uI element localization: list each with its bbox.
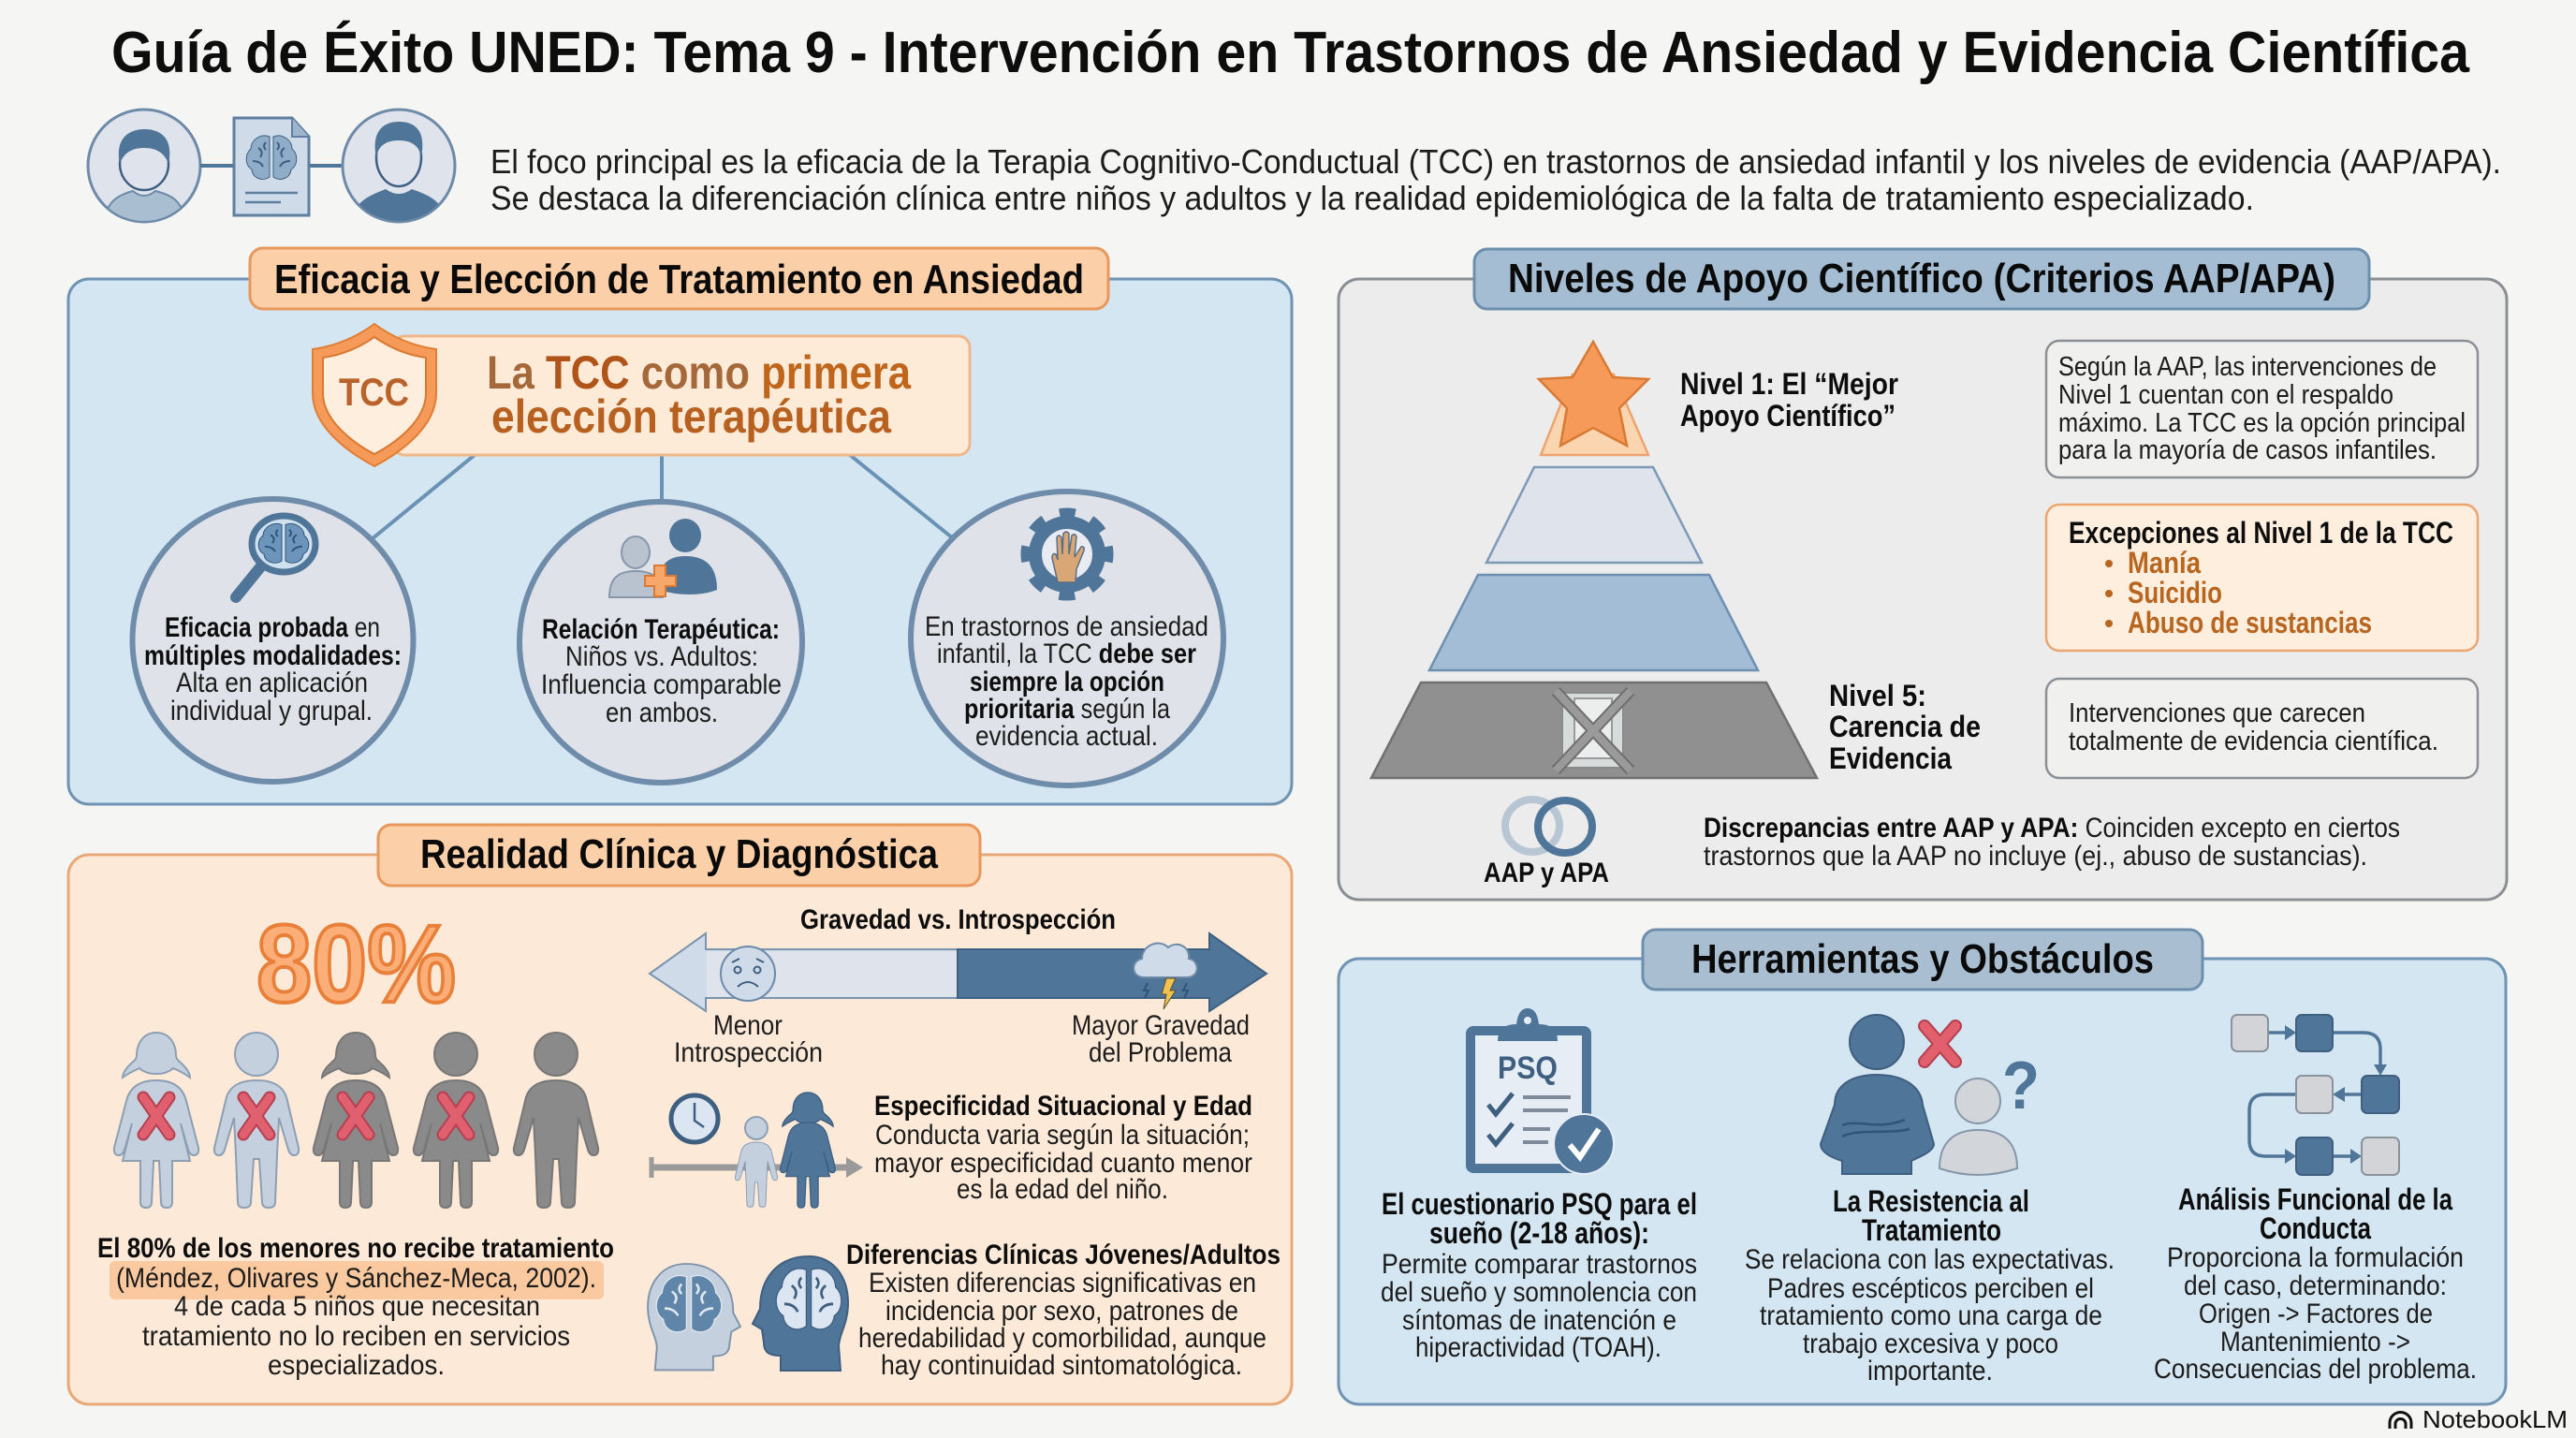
- circle: TCC prioritaria: prioritaria según la: [964, 694, 1170, 725]
- circle: TCC prioritaria: En trastornos de ansiedad: [925, 611, 1208, 642]
- heading pill: niveles: Niveles de Apoyo Científico (Criterios AAP/APA): [1508, 256, 2335, 301]
- text: análisis funcional: Origen -> Factores de: [2199, 1299, 2433, 1329]
- chart: gravedad vs introspección arrow: del Problema: [1089, 1037, 1232, 1068]
- box: excepciones al nivel 1: Manía: [2128, 546, 2201, 580]
- panel: herramientas y obstáculos: [1339, 930, 2506, 1404]
- text: cuestionario PSQ: hiperactividad (TOAH).: [1415, 1332, 1661, 1363]
- text: análisis funcional: del caso, determinando:: [2184, 1270, 2447, 1301]
- icon: adult in circle: [343, 110, 455, 225]
- heading pill: eficacia: [250, 248, 1108, 309]
- chart: gravedad vs introspección arrow: Gravedad vs. Introspección: [800, 904, 1116, 935]
- circle: relación terapéutica: Influencia comparable: [541, 669, 782, 700]
- text: 80% sin tratamiento: tratamiento no lo reciben en servicios: [142, 1321, 570, 1352]
- chart: evidence pyramid: [1371, 342, 1817, 778]
- text: análisis funcional: Conducta: [2260, 1211, 2371, 1245]
- icon: two people with plus: [609, 519, 717, 597]
- circle: relación terapéutica: Relación Terapéutica:: [542, 614, 780, 645]
- text: 80% sin tratamiento: especializados.: [268, 1350, 445, 1381]
- circle: TCC prioritaria: [911, 492, 1223, 785]
- icon: resistant adult and sceptical parent: ?: [2002, 1049, 2040, 1123]
- heading pill: herramientas: [1643, 930, 2203, 990]
- statistic: 80%: 80%: [256, 902, 456, 1026]
- icon: clock, timeline and children: [651, 1093, 863, 1208]
- text: especificidad situacional: [874, 1091, 1252, 1205]
- icon: resistant adult and sceptical parent: [1821, 1015, 2040, 1175]
- icon: PSQ clipboard: PSQ: [1498, 1050, 1558, 1086]
- heading pill: realidad clínica: [378, 825, 980, 886]
- circle: relación terapéutica: [520, 502, 802, 783]
- chart: gravedad vs introspección arrow: Mayor Gravedad: [1072, 1010, 1250, 1041]
- icon: AAP y APA rings: AAP y APA: [1484, 858, 1609, 888]
- icon: functional analysis flowchart: [2232, 1015, 2399, 1175]
- chart: gravedad vs introspección arrow: Menor: [713, 1010, 783, 1041]
- logo: NotebookLM: NotebookLM: [2422, 1405, 2568, 1433]
- circle: eficacia probada: múltiples modalidades:: [144, 640, 402, 671]
- text: resistencia: Padres escépticos perciben el: [1767, 1273, 2094, 1304]
- icon: PSQ clipboard: [1466, 1008, 1614, 1174]
- callout: TCC primera elección: elección terapéutica: [491, 390, 892, 443]
- text: resistencia: trabajo excesiva y poco: [1803, 1328, 2058, 1359]
- heading pill: eficacia: Eficacia y Elección de Tratamiento en Ansiedad: [274, 257, 1084, 302]
- text: 80% sin tratamiento: El 80% de los menores no recibe tratamiento: [97, 1233, 614, 1264]
- pictogram: five children: [114, 1033, 598, 1208]
- child 5: treated: [514, 1033, 598, 1208]
- circle: TCC prioritaria: evidencia actual.: [975, 721, 1158, 752]
- text: discrepancias: trastornos que la AAP no incluye (ej., abuso de sustancias).: [1704, 841, 2367, 872]
- circle: relación terapéutica: Niños vs. Adultos:: [565, 641, 758, 672]
- circle: eficacia probada: Alta en aplicación: [176, 668, 368, 698]
- text: diferencias jóvenes/adultos: incidencia por sexo, patrones de: [886, 1296, 1238, 1327]
- child 4: girl, no treatment: [414, 1033, 498, 1208]
- text: resistencia: La Resistencia al: [1833, 1184, 2029, 1218]
- circle: eficacia probada: individual y grupal.: [170, 696, 373, 726]
- icon: AAP y APA rings: [1484, 800, 1609, 888]
- chart: gravedad vs introspección arrow: Introspección: [674, 1037, 823, 1068]
- heading pill: herramientas: Herramientas y Obstáculos: [1691, 936, 2154, 982]
- icon: storm cloud: [1134, 944, 1197, 1009]
- intro text: Se destaca la diferenciación clínica entre niños y adultos y la realidad epidemiológica de la falta de tratamiento especializado.: [490, 179, 2254, 217]
- text: resistencia: [1745, 1184, 2115, 1387]
- text: resistencia: Tratamiento: [1862, 1213, 2001, 1247]
- heading pill: niveles: [1474, 249, 2369, 309]
- text: cuestionario PSQ: [1381, 1187, 1697, 1363]
- text: resistencia: Se relaciona con las expectativas.: [1745, 1244, 2115, 1275]
- icon: child in circle: [88, 110, 200, 225]
- box: excepciones al nivel 1: Excepciones al Nivel 1 de la TCC: [2069, 516, 2453, 550]
- box: respaldo AAP nivel 1: Nivel 1 cuentan con el respaldo: [2058, 380, 2393, 410]
- text: especificidad situacional: es la edad del niño.: [957, 1174, 1168, 1205]
- child 2: boy, no treatment: [214, 1033, 299, 1208]
- text: discrepancias: Discrepancias entre AAP y APA: Coinciden excepto en ciertos: [1704, 813, 2400, 844]
- box: excepciones al nivel 1: [2046, 505, 2478, 651]
- box: respaldo AAP nivel 1: [2046, 341, 2478, 477]
- icon: TCC shield: [313, 324, 436, 466]
- panel: eficacia y elección de tratamiento: [68, 248, 1292, 804]
- circle: TCC prioritaria: infantil, la TCC debe ser: [937, 638, 1196, 669]
- box: respaldo AAP nivel 1: máximo. La TCC es la opción principal: [2058, 408, 2466, 438]
- panel: niveles de apoyo científico: [1339, 249, 2507, 900]
- text: análisis funcional: Análisis Funcional de la: [2178, 1182, 2452, 1216]
- circle: relación terapéutica: en ambos.: [606, 697, 718, 728]
- child 1: girl, no treatment: [114, 1033, 198, 1208]
- panel: realidad clínica y diagnóstica: [68, 825, 1292, 1404]
- box: excepciones al nivel 1: Suicidio: [2128, 576, 2222, 609]
- text: diferencias jóvenes/adultos: Existen diferencias significativas en: [869, 1268, 1256, 1299]
- label: nivel 5: Evidencia: [1829, 741, 1952, 775]
- text: cuestionario PSQ: El cuestionario PSQ para el: [1382, 1187, 1697, 1221]
- icon: TCC shield: TCC: [339, 370, 409, 414]
- text: cuestionario PSQ: síntomas de inatención e: [1402, 1305, 1676, 1336]
- text: análisis funcional: Consecuencias del problema.: [2154, 1354, 2477, 1385]
- text: resistencia: importante.: [1867, 1356, 1993, 1387]
- label: nivel 5: [1829, 679, 1981, 775]
- callout: TCC primera elección: La TCC como primera: [487, 346, 912, 399]
- circle: eficacia probada: Eficacia probada en: [165, 612, 380, 643]
- text: cuestionario PSQ: sueño (2-18 años):: [1429, 1216, 1649, 1250]
- icon: sad face: [721, 946, 775, 1001]
- intro text: [490, 142, 2501, 217]
- icon group: child, brain document, adult: [88, 110, 455, 225]
- box: excepciones al nivel 1: Abuso de sustancias: [2128, 606, 2372, 639]
- heading pill: realidad clínica: Realidad Clínica y Diagnóstica: [420, 831, 938, 877]
- label: nivel 5: Carencia de: [1829, 710, 1981, 743]
- text: análisis funcional: Proporciona la formulación: [2167, 1242, 2464, 1273]
- box: sin evidencia: [2046, 679, 2478, 778]
- child 3: girl, no treatment: [314, 1033, 398, 1208]
- box: respaldo AAP nivel 1: Según la AAP, las intervenciones de: [2058, 352, 2437, 382]
- box: sin evidencia: Intervenciones que carecen: [2069, 698, 2365, 728]
- circle: eficacia probada: [133, 499, 414, 782]
- chart: gravedad vs introspección arrow: [650, 904, 1266, 1068]
- label: nivel 1: Nivel 1: El “Mejor: [1680, 367, 1898, 401]
- label: nivel 1: Apoyo Científico”: [1680, 399, 1895, 433]
- text: análisis funcional: [2154, 1182, 2477, 1385]
- box: sin evidencia: totalmente de evidencia científica.: [2069, 726, 2438, 756]
- icon: heads with brains: [648, 1256, 848, 1371]
- text: cuestionario PSQ: del sueño y somnolencia con: [1381, 1277, 1697, 1308]
- text: diferencias jóvenes/adultos: [846, 1240, 1281, 1381]
- callout: TCC primera elección: [393, 336, 970, 455]
- text: especificidad situacional: Conducta varia según la situación;: [875, 1120, 1250, 1151]
- text: diferencias jóvenes/adultos: heredabilidad y comorbilidad, aunque: [858, 1323, 1266, 1354]
- text: resistencia: tratamiento como una carga de: [1760, 1300, 2102, 1331]
- icon: gear with hand: [1017, 505, 1117, 604]
- text: cuestionario PSQ: Permite comparar trastornos: [1382, 1249, 1697, 1280]
- label: nivel 1: [1680, 367, 1898, 433]
- icon: magnifier with brain: [236, 516, 315, 597]
- icon: brain document: [234, 118, 309, 215]
- circle: TCC prioritaria: siempre la opción: [970, 667, 1164, 697]
- text: 80% sin tratamiento: 4 de cada 5 niños que necesitan: [174, 1291, 540, 1322]
- text: análisis funcional: Mantenimiento ->: [2220, 1327, 2410, 1357]
- label: nivel 5: Nivel 5:: [1829, 679, 1926, 712]
- text: 80% sin tratamiento: (Méndez, Olivares y Sánchez-Meca, 2002).: [116, 1263, 596, 1294]
- text: diferencias jóvenes/adultos: hay continuidad sintomatológica.: [881, 1350, 1242, 1381]
- text: especificidad situacional: mayor especificidad cuanto menor: [874, 1148, 1252, 1179]
- text: 80% sin tratamiento: [97, 1233, 614, 1381]
- text: especificidad situacional: Especificidad Situacional y Edad: [874, 1091, 1252, 1122]
- text: diferencias jóvenes/adultos: Diferencias Clínicas Jóvenes/Adultos: [846, 1240, 1281, 1270]
- box: respaldo AAP nivel 1: para la mayoría de casos infantiles.: [2058, 435, 2437, 465]
- text: discrepancias: [1704, 813, 2400, 872]
- icon: crossed-out document: [1556, 691, 1631, 770]
